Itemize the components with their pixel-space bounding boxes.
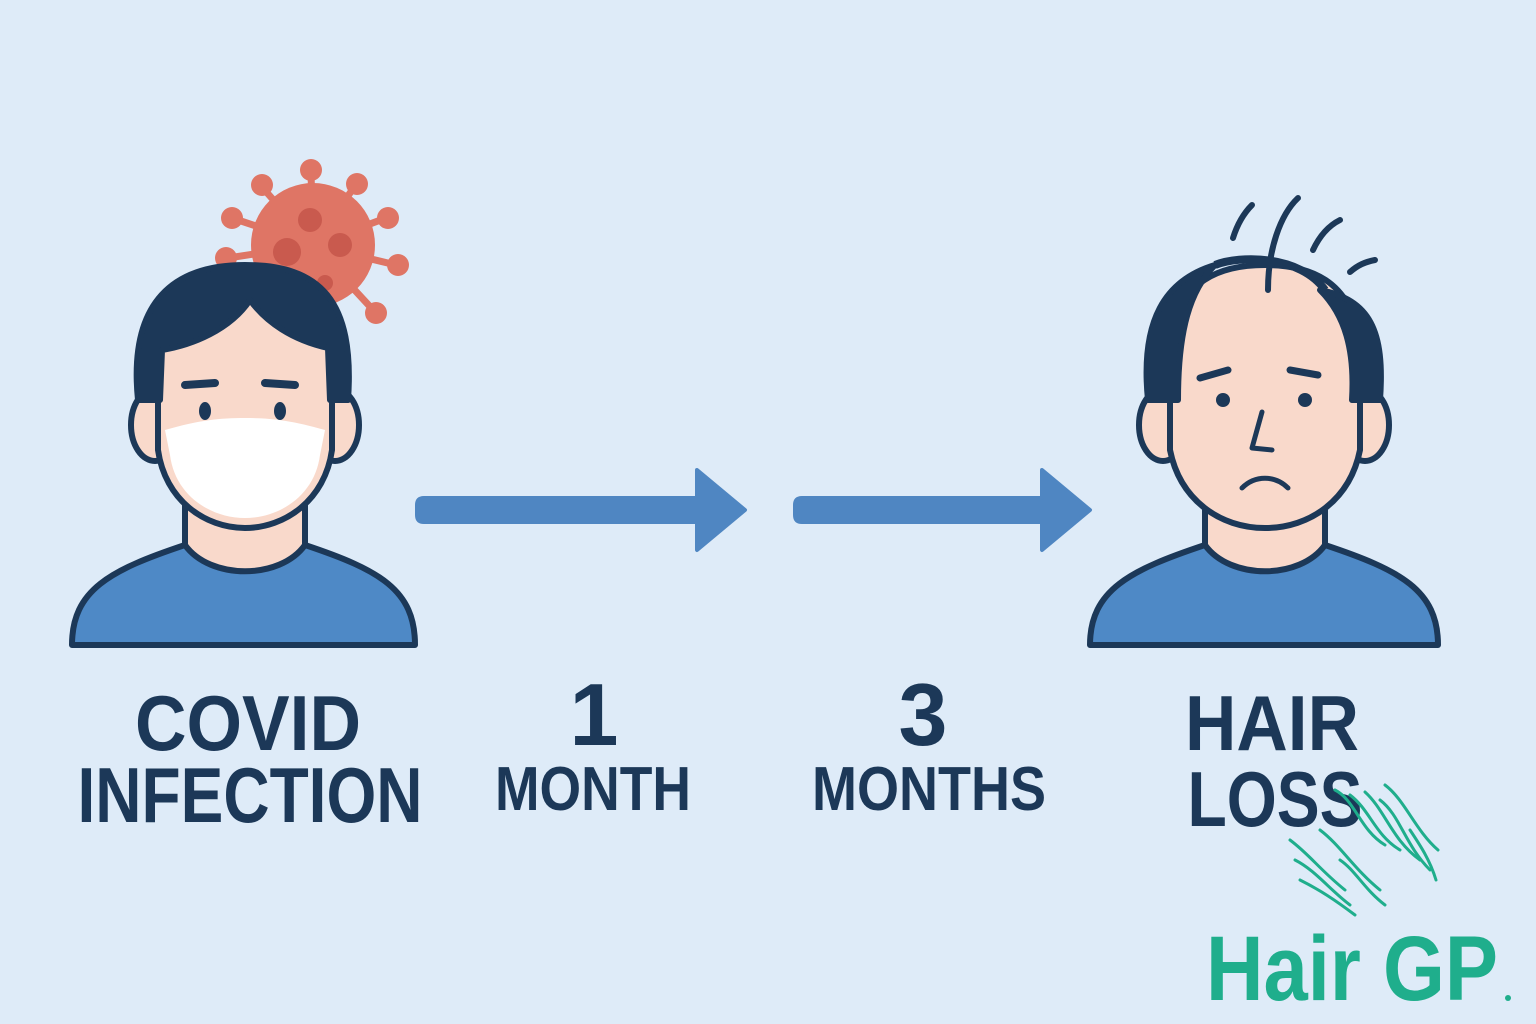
panel: hair loss person	[1090, 198, 1438, 645]
text: 1 month: MONTH	[495, 755, 691, 824]
icon: virus	[215, 159, 409, 324]
text: 3 months	[812, 665, 1046, 824]
logo: hair gp	[1206, 785, 1511, 1020]
panel: covid person	[72, 265, 415, 645]
text: 1 month	[495, 665, 691, 824]
text: covid infection: INFECTION	[78, 751, 422, 839]
text: covid infection: COVID	[135, 679, 361, 767]
text: 1 month: 1	[570, 665, 618, 764]
text: hair loss	[1185, 679, 1362, 843]
text: covid infection	[78, 679, 422, 839]
arrow: 3 months	[795, 470, 1090, 550]
text: hair loss: HAIR	[1185, 679, 1359, 767]
text: hair loss: LOSS	[1188, 755, 1362, 843]
text: 3 months: MONTHS	[812, 755, 1046, 824]
arrow: 1 month	[417, 470, 745, 550]
logo: hair gp: Hair GP	[1206, 918, 1498, 1020]
text: 3 months: 3	[899, 665, 947, 764]
